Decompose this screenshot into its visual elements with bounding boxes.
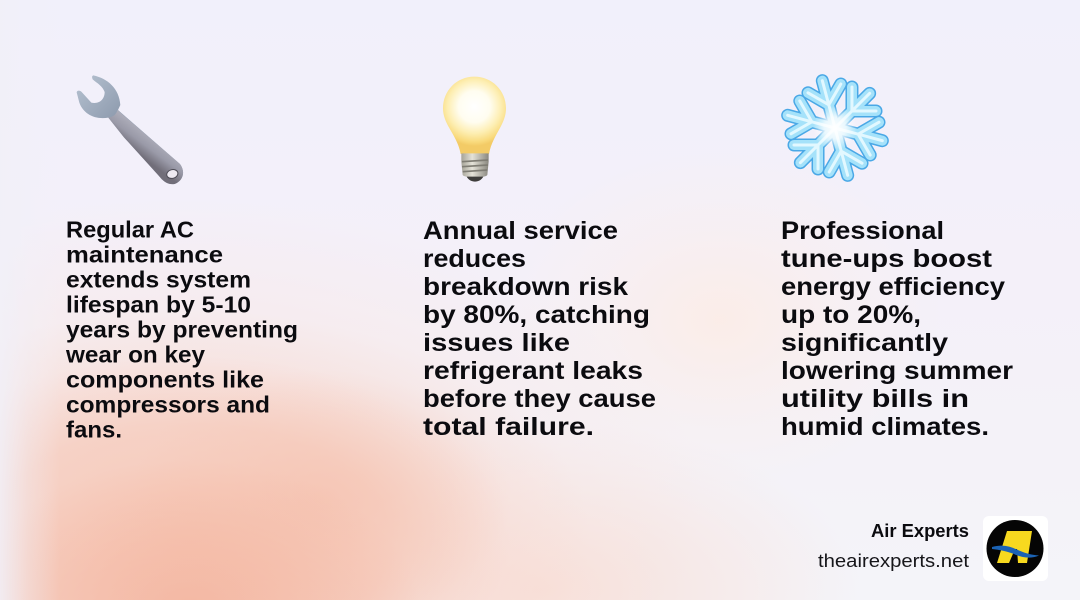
text block: energy efficiency: up to 20%, <box>781 301 921 329</box>
text block: energy efficiency: humid climates. <box>781 413 989 441</box>
text block: breakdown risk <box>423 217 656 441</box>
text block: system lifespan: fans. <box>66 417 122 443</box>
text block: breakdown risk: issues like <box>423 329 570 357</box>
text block: breakdown risk: Annual service <box>423 217 618 245</box>
text block: system lifespan: Regular AC <box>66 217 194 243</box>
text block: energy efficiency: tune-ups boost <box>781 245 993 273</box>
text block: breakdown risk: breakdown risk <box>423 273 628 301</box>
text block: system lifespan <box>65 217 298 443</box>
text block: system lifespan: lifespan by 5-10 <box>66 292 251 318</box>
text block: system lifespan: components like <box>66 367 264 393</box>
text block: system lifespan: maintenance <box>66 242 223 268</box>
text block: energy efficiency: lowering summer <box>781 357 1013 385</box>
text block: breakdown risk: by 80%, catching <box>423 301 650 329</box>
logo <box>983 516 1048 581</box>
brand website: theairexperts.net <box>818 550 969 571</box>
text block: system lifespan: wear on key <box>65 342 205 368</box>
icon: wrench <box>77 75 183 184</box>
icon: light bulb <box>443 77 506 182</box>
text block: energy efficiency: Professional <box>781 217 944 245</box>
text block: breakdown risk: refrigerant leaks <box>423 357 643 385</box>
text block: breakdown risk: before they cause <box>423 385 656 413</box>
text block: system lifespan: compressors and <box>66 392 270 418</box>
text block: energy efficiency: utility bills in <box>781 385 969 413</box>
text block: system lifespan: extends system <box>66 267 251 293</box>
text block: breakdown risk: reduces <box>423 245 526 273</box>
text block: energy efficiency: energy efficiency <box>781 273 1005 301</box>
text block: energy efficiency <box>781 217 1013 441</box>
text block: system lifespan: years by preventing <box>66 317 298 343</box>
brand name: Air Experts <box>871 521 969 541</box>
text block: energy efficiency: significantly <box>781 329 948 357</box>
icon: snowflake <box>783 76 887 180</box>
text block: breakdown risk: total failure. <box>423 413 594 441</box>
